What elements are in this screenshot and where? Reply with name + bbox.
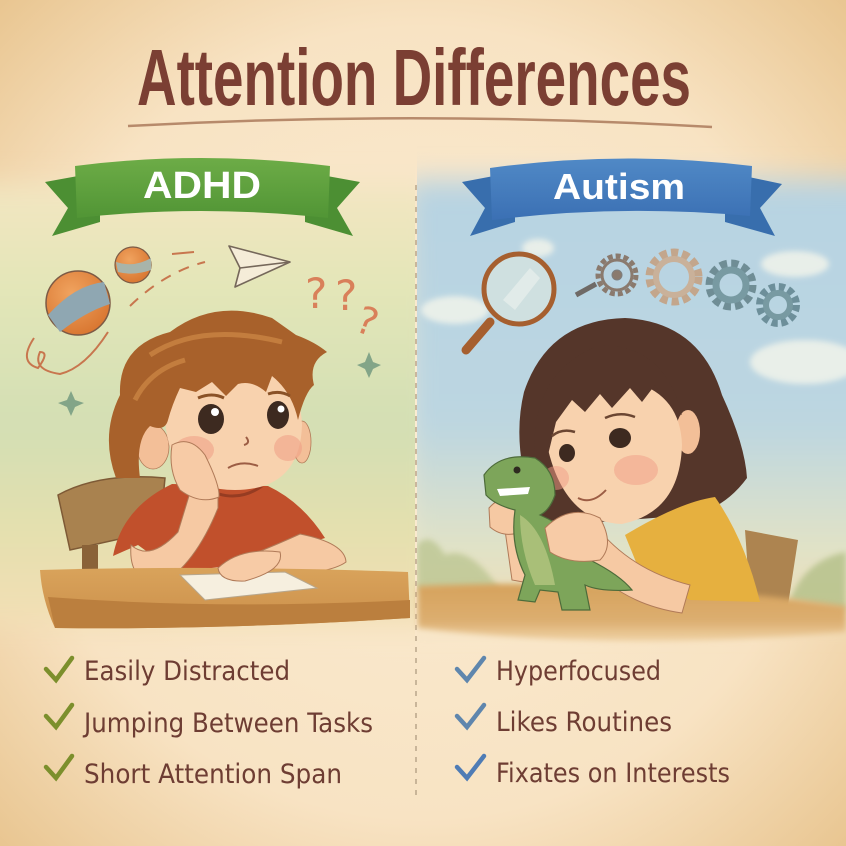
face [546,378,682,524]
panel: Autism background [405,180,846,620]
ear [676,410,700,454]
icon: paper airplane [229,246,290,287]
teal gear [710,264,752,306]
item: Short Attention Span [84,759,342,790]
banner label: Autism [553,166,685,207]
center divider [415,185,417,795]
far arm [505,530,540,585]
face [165,362,302,490]
item: Likes Routines [496,707,672,738]
left arm [131,486,218,585]
shirt [625,497,760,602]
banner: ADHD [45,158,360,236]
icon: small ball [115,247,151,283]
list: ADHD traits [46,656,373,790]
clouds [421,239,846,384]
icon: gears [576,253,796,323]
icon: question marks [305,269,384,346]
list: Autism traits [457,656,730,789]
hair back [519,318,747,522]
cheeks [543,466,569,490]
brows [552,414,635,436]
hand on dinosaur [545,512,608,561]
ear right [293,421,311,463]
title underline [128,118,712,127]
chair: boy [58,477,165,575]
item: Hyperfocused [496,656,661,687]
small gear [576,256,636,295]
item: Easily Distracted [84,656,290,687]
icon: striped ball [46,271,110,335]
banner: Autism [462,158,782,236]
near arm [585,525,690,613]
icon: question marks: ? [350,297,384,346]
icon: question marks: ? [305,269,327,318]
fringe [535,345,682,455]
illustration: boy [109,311,346,585]
dashed motion trail [27,252,205,374]
item: Fixates on Interests [496,758,730,789]
icon: question marks: ? [335,271,357,320]
bushes [417,539,500,590]
icon: sparkles [58,352,381,416]
hand on cheek [171,442,219,500]
illustration: girl [489,318,760,613]
mouth [578,490,606,500]
item: Jumping Between Tasks [82,708,373,739]
right arm [222,534,346,580]
paper sheet [180,572,317,600]
toy dinosaur [484,457,632,610]
eyes [198,404,224,434]
shirt [113,484,325,572]
cheeks [174,436,214,464]
far hand [489,498,526,534]
panel: ADHD background [0,185,440,625]
hand on paper [218,551,281,581]
nose and mouth [228,437,258,468]
beige gear [650,253,698,301]
icon: magnifying glass [466,254,554,350]
chair: girl [745,530,798,605]
banner label: ADHD [143,165,261,207]
small teal gear [760,287,796,323]
hair [109,311,327,478]
desk: girl [418,584,846,641]
neck collar [205,486,262,496]
eyes [559,444,575,462]
desk: boy [40,568,410,628]
ear left [137,425,169,469]
brows [198,392,290,398]
